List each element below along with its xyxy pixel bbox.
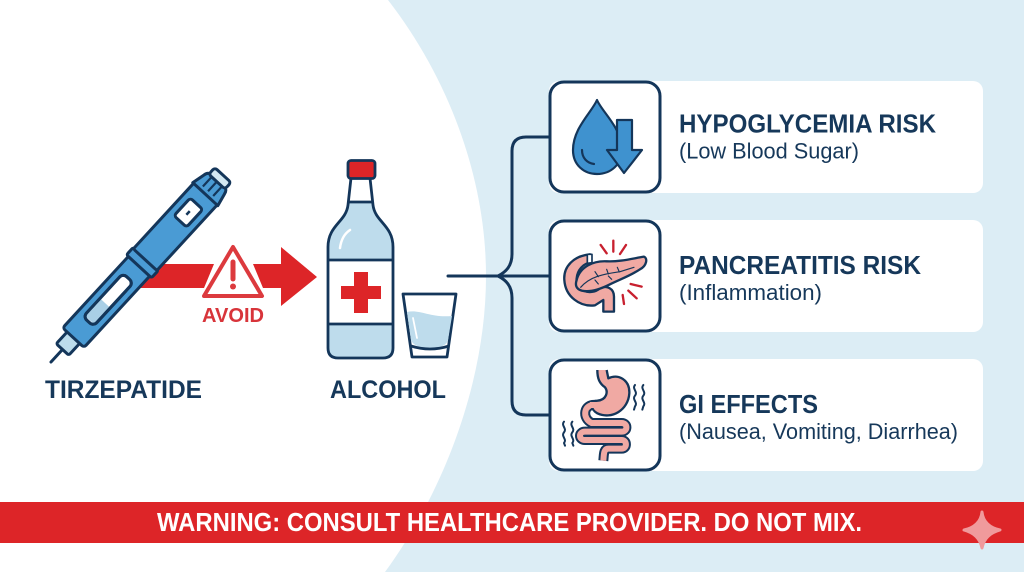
panel: gi effects — [549, 359, 983, 471]
warning banner — [0, 502, 1024, 543]
icon box — [550, 82, 660, 192]
icon: blood drop with down arrow — [573, 100, 642, 174]
red cross — [341, 272, 381, 313]
icon: sparkle — [964, 512, 1000, 548]
icon box — [550, 360, 660, 470]
subtext: (Inflammation) — [679, 280, 822, 305]
label: alcohol: ALCOHOL — [330, 376, 446, 404]
red arrow with warning — [140, 247, 317, 327]
icon: glass — [403, 294, 456, 357]
connector lines — [448, 137, 549, 415]
icon box — [550, 221, 660, 331]
banner text: WARNING: CONSULT HEALTHCARE PROVIDER. DO NOT MIX. — [157, 507, 862, 537]
heading: PANCREATITIS RISK — [679, 250, 921, 280]
heading: GI EFFECTS — [679, 389, 818, 419]
subtext: (Nausea, Vomiting, Diarrhea) — [679, 419, 958, 444]
white arc area — [0, 0, 486, 572]
panel: hypoglycemia — [549, 81, 983, 193]
icon: injection pen — [38, 164, 235, 374]
avoid label: AVOID — [202, 305, 264, 327]
warning triangle — [204, 247, 262, 296]
panel: pancreatitis — [549, 220, 983, 332]
icon: stomach and intestines — [563, 370, 644, 461]
icon: pancreas — [564, 241, 646, 312]
label: tirzepatide: TIRZEPATIDE — [45, 376, 202, 404]
heading: HYPOGLYCEMIA RISK — [679, 108, 936, 138]
icon: alcohol bottle — [328, 160, 393, 358]
subtext: (Low Blood Sugar) — [679, 138, 859, 164]
